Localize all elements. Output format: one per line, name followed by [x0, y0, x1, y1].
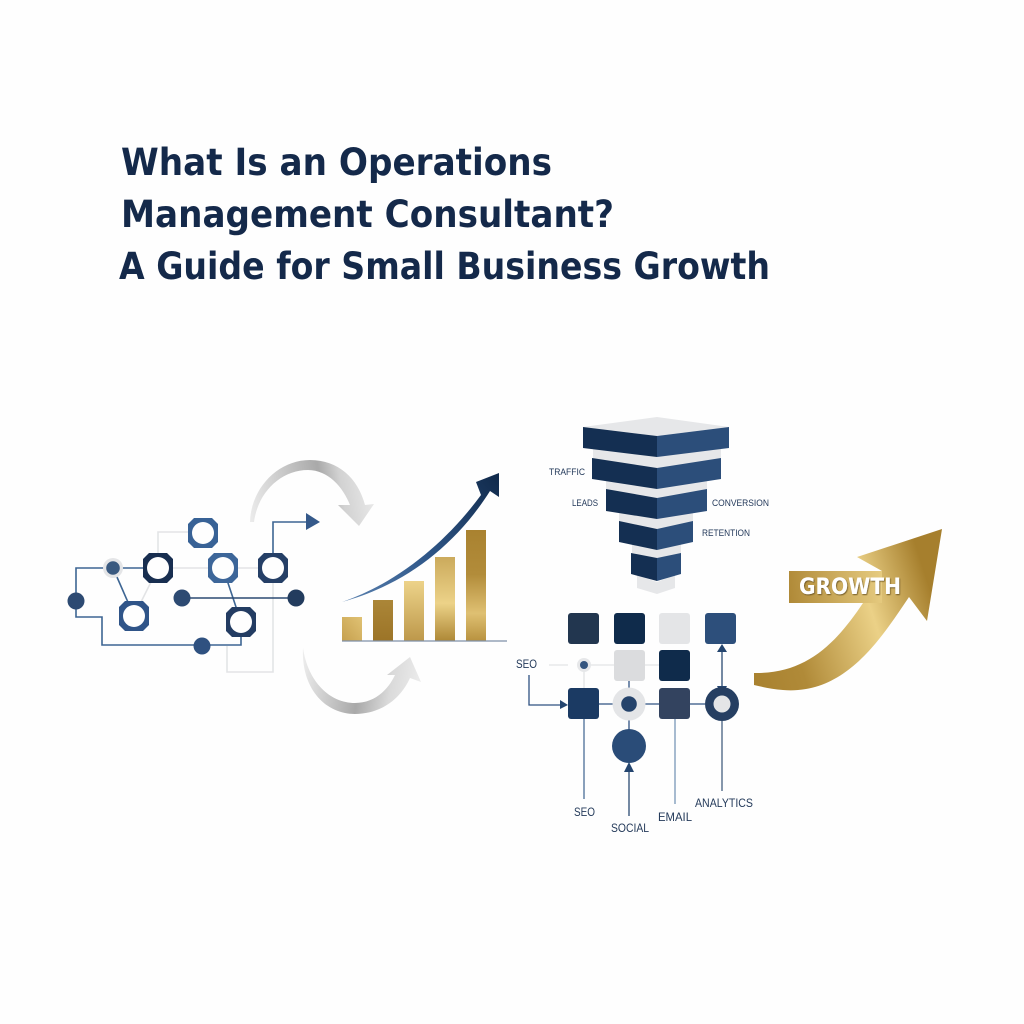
social circle — [612, 729, 646, 763]
tile row 3 — [568, 688, 690, 719]
growth label band — [789, 571, 882, 603]
small node — [577, 658, 591, 672]
funnel — [583, 417, 729, 594]
label: analytics: ANALYTICS — [695, 798, 753, 810]
title: What Is an Operations — [121, 141, 552, 184]
icon: network arrowhead — [306, 513, 320, 530]
center node — [612, 688, 646, 720]
funnel label: leads: LEADS — [572, 498, 598, 509]
growth arrow — [754, 529, 942, 690]
connector lines — [529, 650, 722, 816]
funnel top layer — [583, 417, 729, 457]
bar chart — [342, 530, 507, 641]
analytics ring — [705, 687, 739, 721]
arrow: top curved gray — [250, 460, 374, 526]
label: email: EMAIL — [658, 812, 693, 824]
title — [119, 141, 770, 288]
chart baseline — [342, 640, 507, 642]
bar 1 — [342, 617, 362, 641]
grid arrowheads — [560, 644, 727, 772]
bar 3 — [404, 581, 424, 641]
growth label text: GROWTH — [799, 575, 901, 600]
bar 2 — [373, 600, 393, 641]
node halo — [103, 558, 123, 578]
bar 4 — [435, 557, 455, 641]
arrow body — [754, 529, 942, 690]
octagon nodes — [119, 518, 288, 637]
tile row 2 — [614, 650, 690, 681]
title: A Guide for Small Business Growth — [119, 245, 770, 288]
funnel layer 2 — [592, 458, 721, 489]
funnel gray bands — [593, 448, 721, 560]
arrow: chart trend — [342, 473, 499, 602]
marketing channel grid — [529, 613, 739, 816]
funnel layer 5 — [631, 553, 681, 581]
arrow: bottom curved gray — [303, 648, 421, 714]
label: seo left: SEO — [516, 659, 537, 671]
funnel label: retention: RETENTION — [702, 528, 750, 539]
tile row 1 — [568, 613, 736, 644]
funnel label: traffic: TRAFFIC — [549, 467, 585, 478]
funnel layer 3 — [606, 489, 707, 519]
funnel label: conversion: CONVERSION — [712, 498, 769, 509]
label: social: SOCIAL — [611, 823, 650, 835]
process network diagram — [68, 513, 320, 672]
funnel gray tip — [637, 575, 675, 594]
network dots — [68, 561, 304, 654]
title: Management Consultant? — [121, 193, 614, 236]
bar 5 — [466, 530, 486, 641]
label: seo: SEO — [574, 807, 595, 819]
funnel layer 4 — [619, 521, 693, 550]
